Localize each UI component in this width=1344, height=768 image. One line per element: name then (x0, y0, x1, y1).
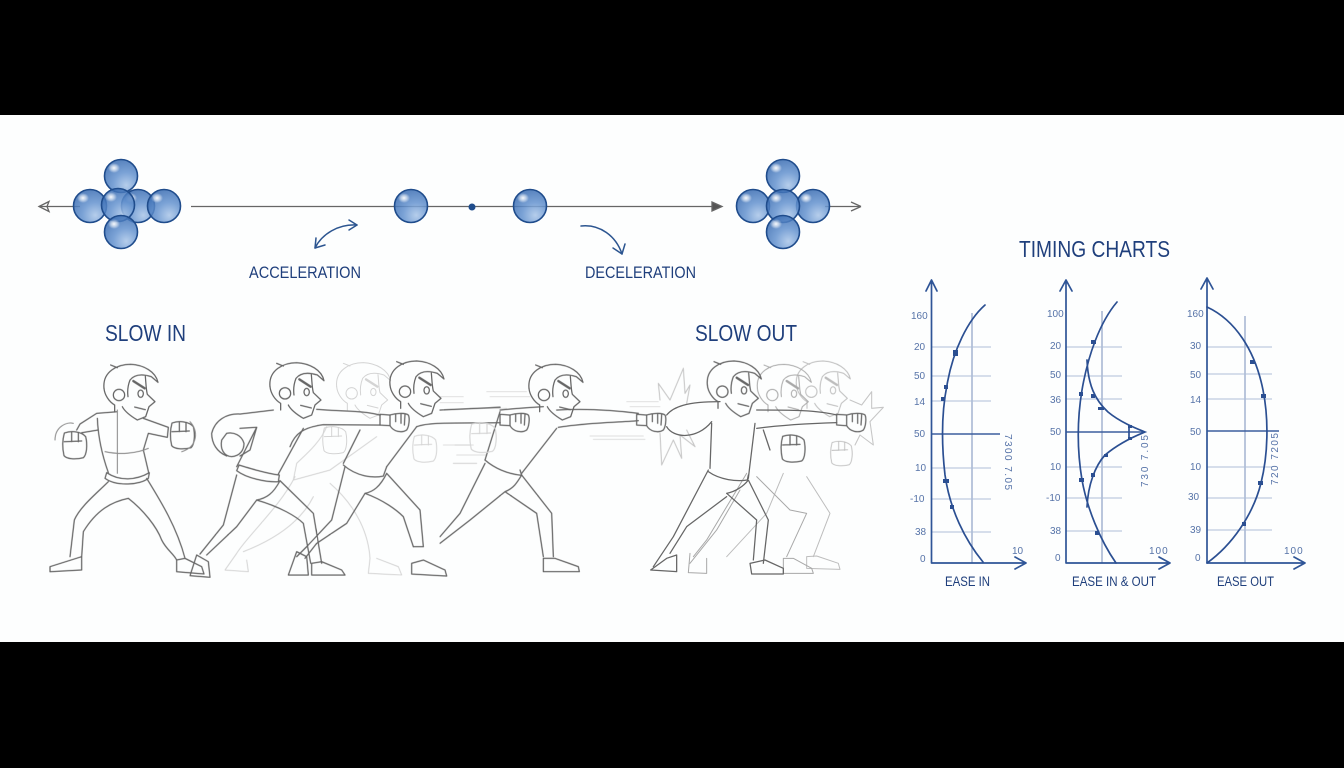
left ball cluster (74, 160, 180, 248)
chart: ease out: 100 (1284, 546, 1304, 557)
speed lines (440, 397, 507, 463)
chart: ease out: 39 (1190, 525, 1202, 536)
fist speed lines (443, 392, 660, 463)
chart: ease in: 50 (914, 429, 926, 440)
chart: ease in and out (1046, 280, 1170, 589)
chart: ease in and out: 100 (1149, 546, 1169, 557)
heading: timing charts: TIMING CHARTS (1019, 236, 1170, 262)
chart: ease out: 30 (1190, 341, 1202, 352)
label: ease out: EASE OUT (1217, 573, 1274, 589)
white panel (0, 115, 1344, 642)
arrow: deceleration (581, 226, 625, 254)
chart: ease in: 50 (914, 371, 926, 382)
heading: slow in: SLOW IN (105, 320, 186, 346)
chart: ease in: 7300 7.05 (1002, 434, 1013, 490)
chart: ease in and out: 38 (1050, 526, 1062, 537)
middle ball left (394, 190, 428, 222)
chart: ease in and out: -10 (1046, 493, 1061, 504)
chart: ease out: 720 7205 (1270, 433, 1281, 485)
chart: ease in: -10 (910, 494, 925, 505)
chart: ease in: 10 (1012, 546, 1024, 557)
impact burst right (850, 392, 883, 445)
chart: ease in and out: 50 (1050, 427, 1062, 438)
ghost pose 6 (688, 364, 813, 573)
ghost in-between pose (225, 363, 437, 575)
chart: ease out (1187, 278, 1305, 589)
middle ball right (514, 190, 546, 222)
pose 3: punch mid (288, 361, 529, 576)
chart: ease out: 160 (1187, 309, 1204, 320)
chart: ease in and out: 10 (1050, 462, 1062, 473)
ghost back fist (470, 423, 496, 453)
pose 2: punch start (190, 363, 409, 577)
label: acceleration: ACCELERATION (249, 263, 361, 282)
panel: ball spacing timeline (39, 160, 861, 282)
panel: punch pose sequence (50, 361, 883, 577)
right ball cluster (736, 160, 830, 248)
chart: ease in: 38 (915, 527, 927, 538)
label: ease in and out: EASE IN & OUT (1072, 573, 1156, 589)
pose 5: follow through (651, 361, 866, 574)
chart: ease in: 10 (915, 463, 927, 474)
chart: ease in: 0 (920, 554, 926, 565)
pose 4: punch extended (440, 364, 666, 572)
centre dot (468, 204, 476, 210)
ghost pose 7 (727, 361, 852, 569)
heading: slow out: SLOW OUT (695, 320, 797, 346)
pose 1: guard stance (50, 364, 204, 574)
chart: ease out: 14 (1190, 395, 1202, 406)
chart: ease out: 50 (1190, 370, 1202, 381)
chart: ease in and out: 20 (1050, 341, 1062, 352)
chart: ease in and out: 730 7.05 (1140, 435, 1151, 487)
chart: ease out: 50 (1190, 427, 1202, 438)
chart: ease in and out: 0 (1055, 553, 1061, 564)
chart: ease in: 20 (914, 342, 926, 353)
chart: ease in and out: 36 (1050, 395, 1062, 406)
chart: ease out: 0 (1195, 553, 1201, 564)
label: ease in: EASE IN (945, 573, 990, 589)
impact burst (658, 368, 695, 465)
chart: ease in: 160 (911, 311, 928, 322)
chart: ease in and out: 100 (1047, 309, 1064, 320)
label: deceleration: DECELERATION (585, 263, 696, 282)
timeline axis with arrows (39, 202, 861, 212)
chart: ease in (910, 280, 1026, 589)
arrow: acceleration (315, 220, 357, 248)
chart: ease in: 14 (914, 397, 926, 408)
chart: ease out: 10 (1190, 462, 1202, 473)
chart: ease in and out: 50 (1050, 370, 1062, 381)
chart: ease out: 30 (1188, 492, 1200, 503)
